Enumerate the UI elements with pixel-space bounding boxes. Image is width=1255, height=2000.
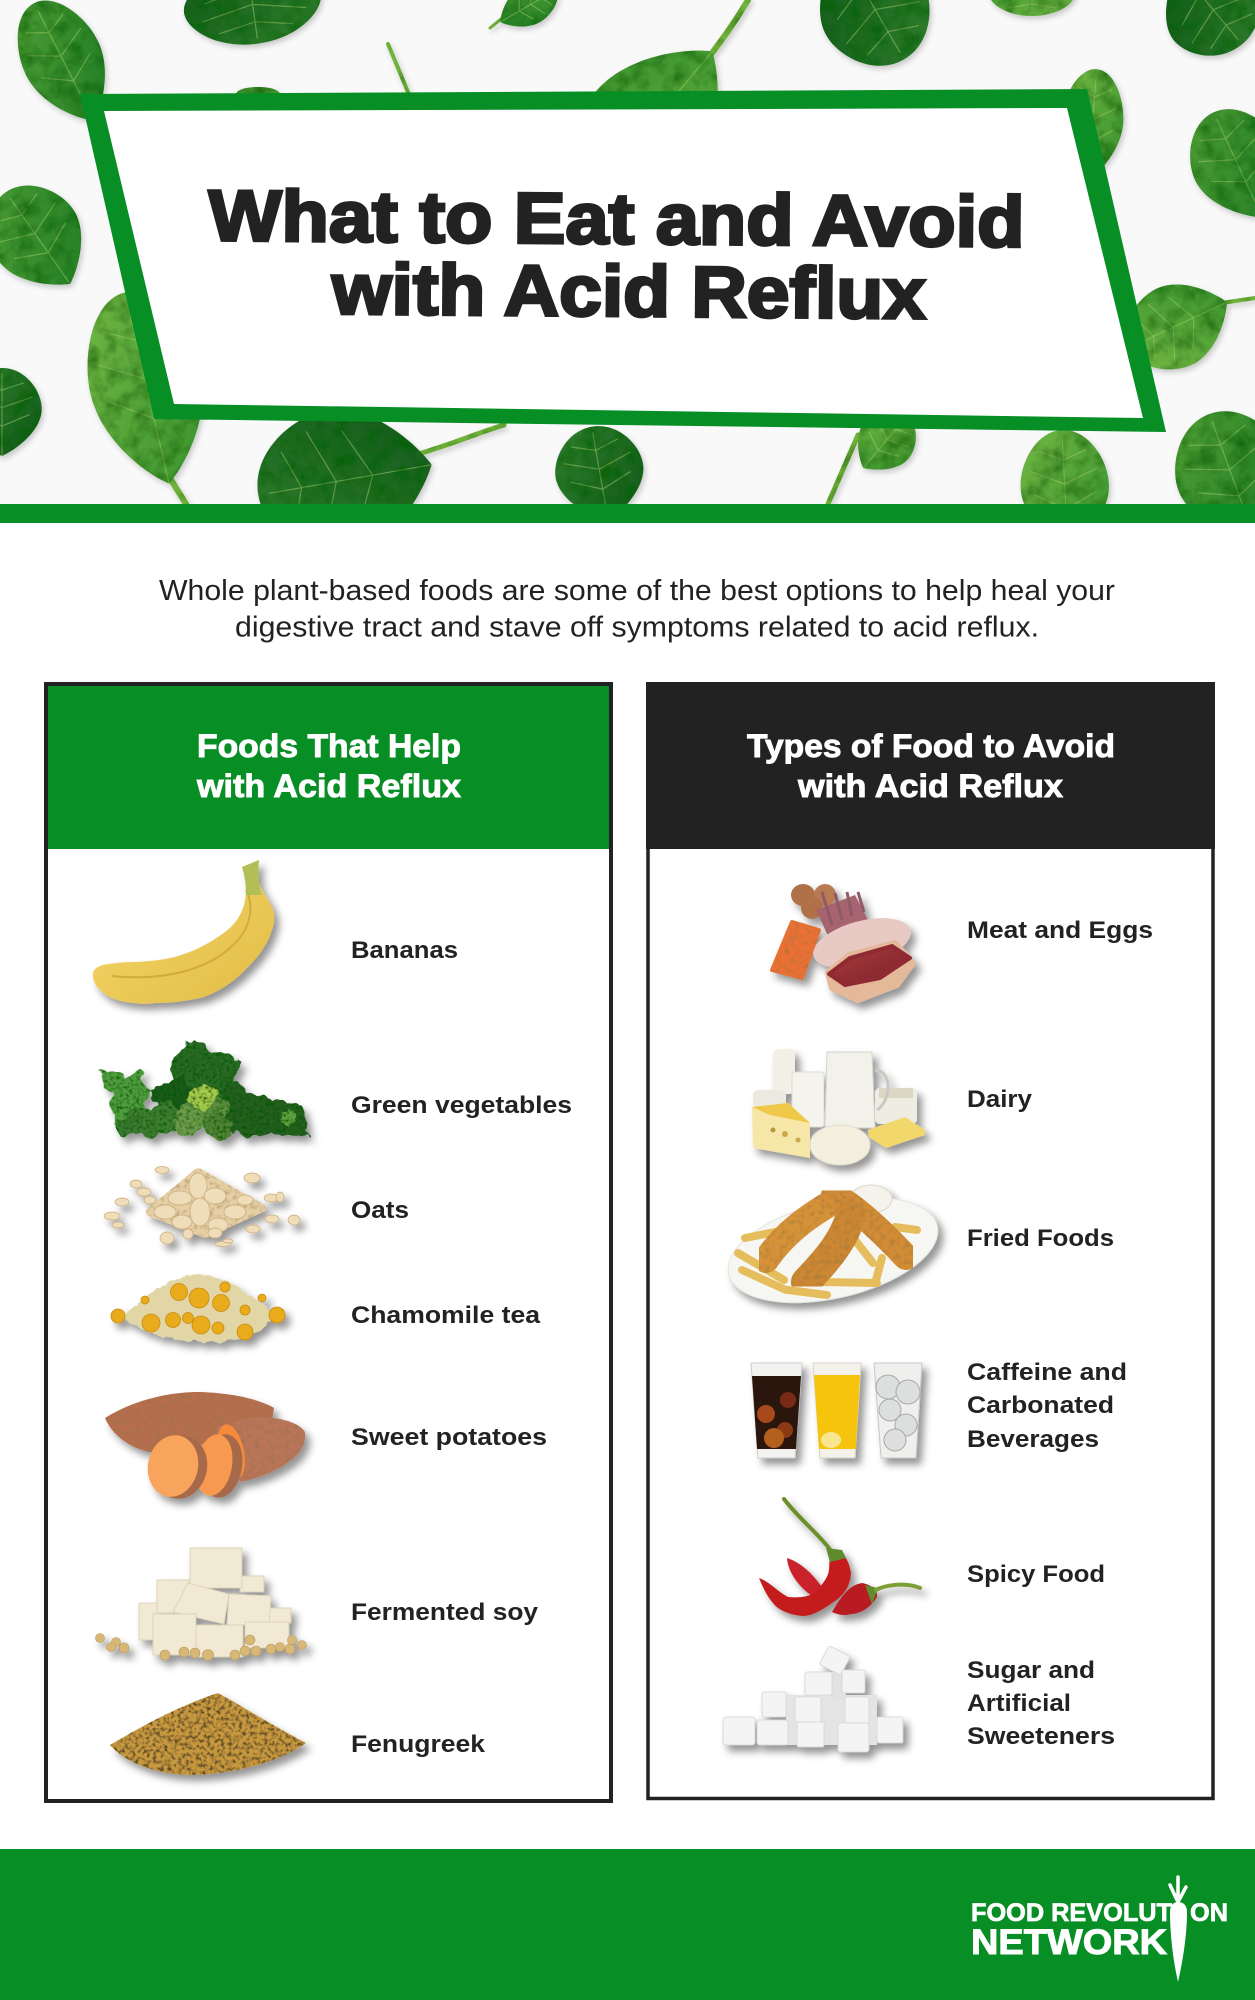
panel header: foods to avoid	[646, 682, 1215, 849]
icon: green vegetables	[98, 1037, 308, 1140]
icon: dairy	[752, 1049, 925, 1165]
icon: fried foods	[718, 1179, 948, 1321]
label: sugar and artificial sweeteners	[967, 1657, 1115, 1750]
icon: carrot	[1170, 1877, 1187, 1982]
logo: Food Revolution Network: FOOD REVOLUT	[971, 1899, 1172, 1927]
label: chamomile tea: Chamomile tea	[351, 1302, 541, 1329]
icon: banana	[93, 860, 274, 1004]
green bar under header	[0, 504, 1255, 523]
logo: Food Revolution Network: ON	[1190, 1899, 1228, 1927]
panel header: foods that help	[48, 686, 609, 849]
icon: beverages	[751, 1363, 922, 1458]
icon: sweet potatoes	[105, 1392, 305, 1504]
panel header: foods to avoid: Types of Food to Avoid	[747, 728, 1115, 764]
icon: cola glass	[751, 1363, 802, 1458]
icon: fenugreek	[110, 1693, 306, 1775]
label: sugar and artificial sweeteners: Sweeteners	[967, 1723, 1115, 1750]
label: sugar and artificial sweeteners: Artificial	[967, 1690, 1071, 1717]
icon: sparkling water glass	[874, 1363, 922, 1458]
label: meat and eggs: Meat and Eggs	[967, 917, 1153, 944]
label: caffeine and carbonated beverages: Carbonated	[967, 1392, 1114, 1419]
icon: sugar cubes	[723, 1646, 903, 1752]
footer band	[0, 1849, 1255, 2000]
logo: Food Revolution Network: NETWORK	[971, 1923, 1167, 1962]
icon: juice glass	[813, 1363, 861, 1458]
label: green vegetables: Green vegetables	[351, 1092, 572, 1119]
label: sugar and artificial sweeteners: Sugar and	[967, 1657, 1095, 1684]
label: fried foods: Fried Foods	[967, 1225, 1114, 1252]
title: with Acid Reflux	[331, 250, 926, 334]
title: What to Eat and Avoid	[208, 176, 1025, 263]
label: fenugreek: Fenugreek	[351, 1731, 486, 1758]
label: caffeine and carbonated beverages	[967, 1359, 1127, 1453]
label: fermented soy: Fermented soy	[351, 1599, 539, 1626]
icon: meat and eggs	[772, 884, 916, 1000]
label: caffeine and carbonated beverages: Beverages	[967, 1426, 1099, 1453]
label: oats: Oats	[351, 1197, 409, 1224]
header frame	[80, 89, 1166, 432]
intro text	[159, 575, 1116, 644]
panel: foods that help	[46, 684, 611, 1801]
panel header: foods that help: with Acid Reflux	[196, 768, 461, 804]
label: dairy: Dairy	[967, 1086, 1033, 1113]
header photo: spinach leaves	[0, 0, 1255, 504]
label: bananas: Bananas	[351, 937, 458, 964]
panel header: foods to avoid: with Acid Reflux	[797, 768, 1063, 804]
panel: foods to avoid	[646, 682, 1215, 1798]
icon: chamomile tea	[111, 1274, 285, 1342]
label: sweet potatoes: Sweet potatoes	[351, 1424, 547, 1451]
label: caffeine and carbonated beverages: Caffeine and	[967, 1359, 1127, 1386]
intro text: digestive tract and stave off symptoms related to acid reflux.	[235, 612, 1039, 644]
icon: oats	[104, 1166, 300, 1246]
logo: Food Revolution Network	[971, 1877, 1228, 1982]
title	[208, 176, 1025, 335]
panel header: foods that help: Foods That Help	[197, 728, 461, 764]
icon: fermented soy	[96, 1548, 306, 1660]
icon: chili peppers	[759, 1499, 920, 1616]
intro text: Whole plant-based foods are some of the best options to help heal your	[159, 575, 1116, 607]
label: spicy food: Spicy Food	[967, 1561, 1105, 1588]
